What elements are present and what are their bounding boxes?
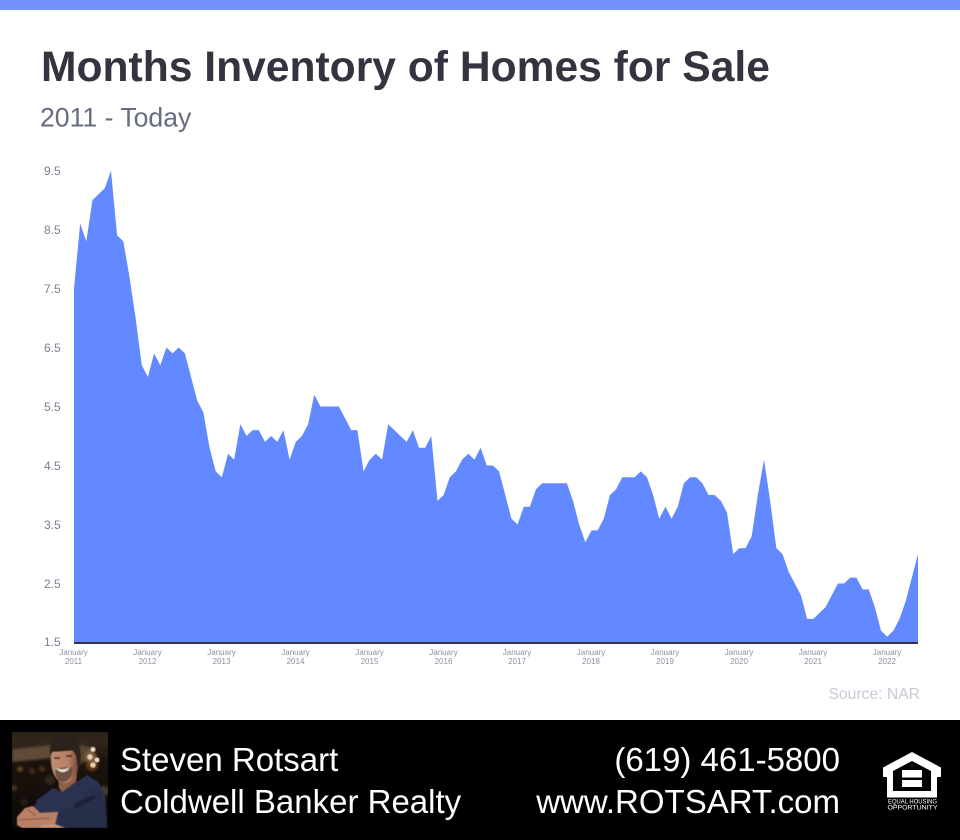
phone number: (619) 461-5800 <box>614 741 840 778</box>
arms <box>17 806 65 828</box>
icon: equal housing opportunity <box>883 752 941 812</box>
x axis labels: January <box>725 648 753 657</box>
top accent bar <box>0 0 960 10</box>
agent company: Coldwell Banker Realty <box>120 783 462 820</box>
y axis labels: 1.5 <box>44 635 61 649</box>
y axis labels: 3.5 <box>44 518 61 532</box>
x axis labels: January <box>133 648 162 657</box>
neck <box>58 774 77 792</box>
x axis labels: January <box>503 648 531 657</box>
agent name: Steven Rotsart <box>120 741 338 778</box>
x axis labels: 2021 <box>804 657 822 666</box>
y axis labels: 9.5 <box>44 164 61 178</box>
x axis labels: 2020 <box>730 657 748 666</box>
website: www.ROTSART.com <box>535 783 840 820</box>
x axis labels: 2014 <box>287 657 305 666</box>
source note: Source: NAR <box>828 686 920 703</box>
x axis labels: January <box>799 648 827 657</box>
x axis labels: 2013 <box>213 657 231 666</box>
icon: equal housing opportunity: EQUAL HOUSING <box>888 800 937 806</box>
x axis labels: January <box>59 648 88 657</box>
x axis labels: 2011 <box>65 657 83 666</box>
y axis labels: 6.5 <box>44 341 61 355</box>
x axis labels: January <box>355 648 384 657</box>
x axis labels: 2015 <box>361 657 379 666</box>
x axis labels <box>59 648 901 666</box>
x axis labels: January <box>281 648 310 657</box>
y axis labels: 7.5 <box>44 282 61 296</box>
x axis labels: 2016 <box>435 657 453 666</box>
smile <box>56 767 70 772</box>
hair <box>50 735 81 767</box>
x axis labels: 2019 <box>656 657 674 666</box>
shirt <box>33 775 107 828</box>
x axis labels: January <box>207 648 236 657</box>
area chart: months inventory <box>74 170 918 642</box>
title: Months Inventory of Homes for Sale <box>41 43 770 91</box>
x axis labels: January <box>651 648 679 657</box>
y axis labels: 2.5 <box>44 577 61 591</box>
x axis labels: 2012 <box>139 657 157 666</box>
y axis labels: 4.5 <box>44 459 61 473</box>
beard <box>55 767 73 782</box>
x axis line <box>74 642 918 644</box>
x axis labels: January <box>429 648 458 657</box>
eyes <box>54 756 72 758</box>
x axis labels: 2022 <box>878 657 896 666</box>
footer band <box>0 720 960 840</box>
x axis labels: January <box>577 648 605 657</box>
head <box>51 750 78 783</box>
x axis labels: January <box>873 648 901 657</box>
agent photo <box>11 732 109 828</box>
x axis labels: 2018 <box>582 657 600 666</box>
icon: equal housing opportunity: OPPORTUNITY <box>888 804 938 812</box>
y axis labels: 5.5 <box>44 400 61 414</box>
x axis labels: 2017 <box>508 657 526 666</box>
y axis labels <box>44 164 61 649</box>
subtitle: 2011 - Today <box>40 102 192 132</box>
y axis labels: 8.5 <box>44 223 61 237</box>
